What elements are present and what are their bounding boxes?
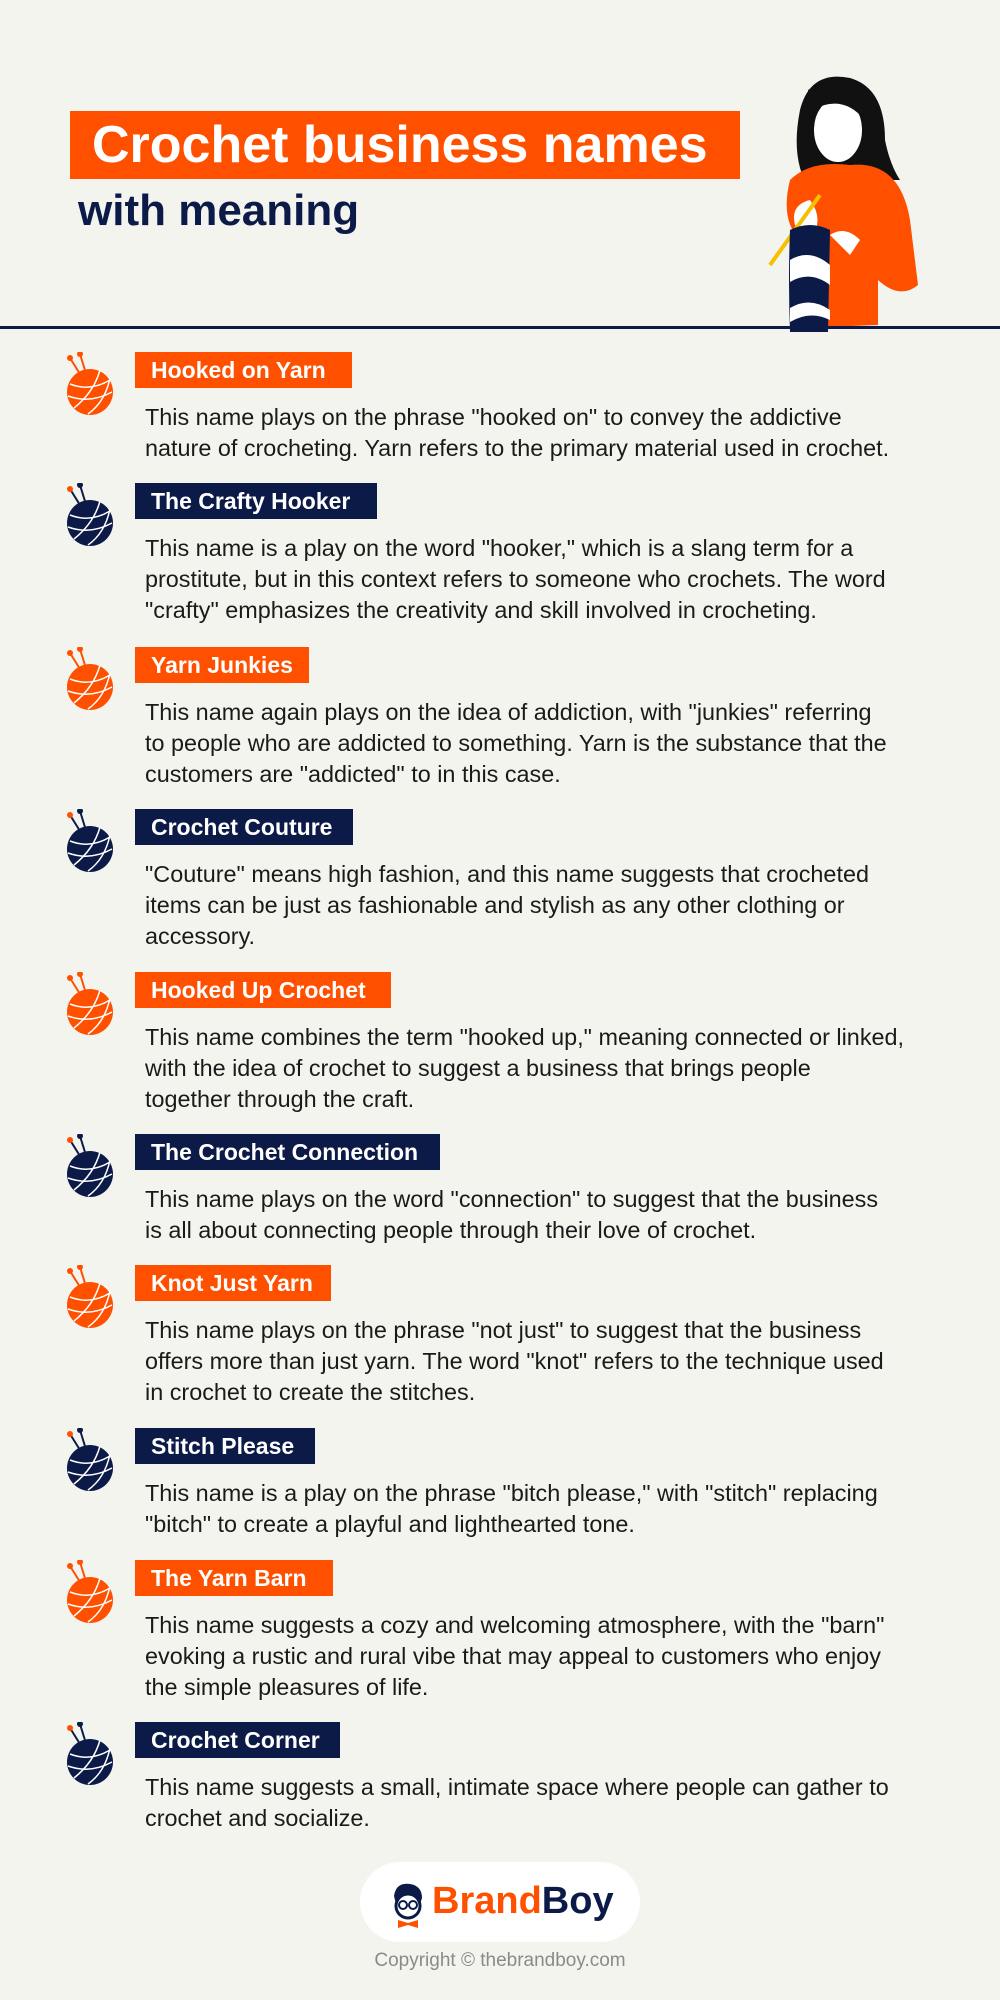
heading [135, 809, 353, 845]
text [145, 1480, 878, 1537]
heading [135, 352, 352, 388]
heading: Stitch Please [151, 1433, 294, 1459]
item 1 [67, 352, 889, 461]
heading: The Crochet Connection [151, 1139, 418, 1165]
text: "crafty" emphasizes the creativity and skill involved in crocheting. [145, 597, 817, 623]
heading [135, 1722, 340, 1758]
icon: yarn navy [67, 1428, 113, 1491]
text [145, 1024, 904, 1112]
icon: yarn navy [67, 809, 113, 872]
icon: yarn navy [67, 1722, 113, 1785]
text: This name suggests a cozy and welcoming atmosphere, with the "barn" [145, 1612, 884, 1638]
heading [135, 972, 391, 1008]
text: with the idea of crochet to suggest a business that brings people [145, 1055, 811, 1081]
text [145, 1612, 884, 1700]
footer logo pill [360, 1862, 640, 1942]
text: This name plays on the word "connection" to suggest that the business [145, 1186, 878, 1212]
heading [135, 483, 377, 519]
text: This name plays on the phrase "hooked on" to convey the addictive [145, 404, 842, 430]
text [145, 1186, 878, 1243]
heading: Crochet Corner [151, 1727, 320, 1753]
item 4 [67, 809, 869, 949]
item 2 [67, 483, 886, 623]
icon: yarn orange [67, 352, 113, 415]
text: crochet and socialize. [145, 1805, 370, 1831]
subtitle: with meaning [78, 186, 359, 235]
text: in crochet to create the stitches. [145, 1379, 475, 1405]
text [145, 861, 869, 949]
icon: yarn navy [67, 1134, 113, 1197]
item 5 [67, 972, 904, 1112]
text: This name again plays on the idea of addiction, with "junkies" referring [145, 699, 872, 725]
heading [135, 1265, 331, 1301]
heading: Yarn Junkies [151, 652, 293, 678]
icon: yarn orange [67, 1560, 113, 1623]
heading [135, 1560, 333, 1596]
text: This name is a play on the phrase "bitch please," with "stitch" replacing [145, 1480, 878, 1506]
title: Crochet business names [92, 116, 708, 174]
text: offers more than just yarn. The word "knot" refers to the technique used [145, 1348, 884, 1374]
brand name: BrandBoy [432, 1880, 614, 1922]
item 9 [67, 1560, 884, 1700]
text [145, 404, 889, 461]
icon: yarn navy [67, 483, 113, 546]
text: This name suggests a small, intimate space where people can gather to [145, 1774, 889, 1800]
text: the simple pleasures of life. [145, 1674, 428, 1700]
text [145, 699, 887, 787]
illustration: woman crocheting [768, 76, 918, 332]
heading: The Crafty Hooker [151, 488, 350, 514]
copyright: Copyright © thebrandboy.com [374, 1950, 626, 1971]
icon: brandboy mascot [394, 1884, 422, 1928]
heading [135, 1134, 440, 1170]
text: prostitute, but in this context refers to someone who crochets. The word [145, 566, 886, 592]
text: accessory. [145, 923, 255, 949]
divider line [0, 326, 1000, 329]
heading: Hooked on Yarn [151, 357, 326, 383]
text: items can be just as fashionable and stylish as any other clothing or [145, 892, 845, 918]
text: is all about connecting people through their love of crochet. [145, 1217, 756, 1243]
heading: Knot Just Yarn [151, 1270, 313, 1296]
text: "Couture" means high fashion, and this name suggests that crocheted [145, 861, 869, 887]
icon: yarn orange [67, 972, 113, 1035]
text: This name is a play on the word "hooker," which is a slang term for a [145, 535, 853, 561]
heading [135, 1428, 315, 1464]
text: This name plays on the phrase "not just" to suggest that the business [145, 1317, 861, 1343]
item 6 [67, 1134, 878, 1243]
text [145, 1774, 889, 1831]
heading: The Yarn Barn [151, 1565, 307, 1591]
icon: yarn orange [67, 647, 113, 710]
text [145, 1317, 884, 1405]
text: together through the craft. [145, 1086, 414, 1112]
heading [135, 647, 309, 683]
text: nature of crocheting. Yarn refers to the primary material used in crochet. [145, 435, 889, 461]
item 7 [67, 1265, 884, 1405]
heading: Crochet Couture [151, 814, 332, 840]
item 10 [67, 1722, 889, 1831]
text: customers are "addicted" to in this case. [145, 761, 561, 787]
text [145, 535, 886, 623]
heading: Hooked Up Crochet [151, 977, 366, 1003]
text: This name combines the term "hooked up," meaning connected or linked, [145, 1024, 904, 1050]
text: to people who are addicted to something. Yarn is the substance that the [145, 730, 887, 756]
text: evoking a rustic and rural vibe that may appeal to customers who enjoy [145, 1643, 881, 1669]
item 8 [67, 1428, 878, 1537]
item 3 [67, 647, 887, 787]
text: "bitch" to create a playful and lighthearted tone. [145, 1511, 635, 1537]
icon: yarn orange [67, 1265, 113, 1328]
